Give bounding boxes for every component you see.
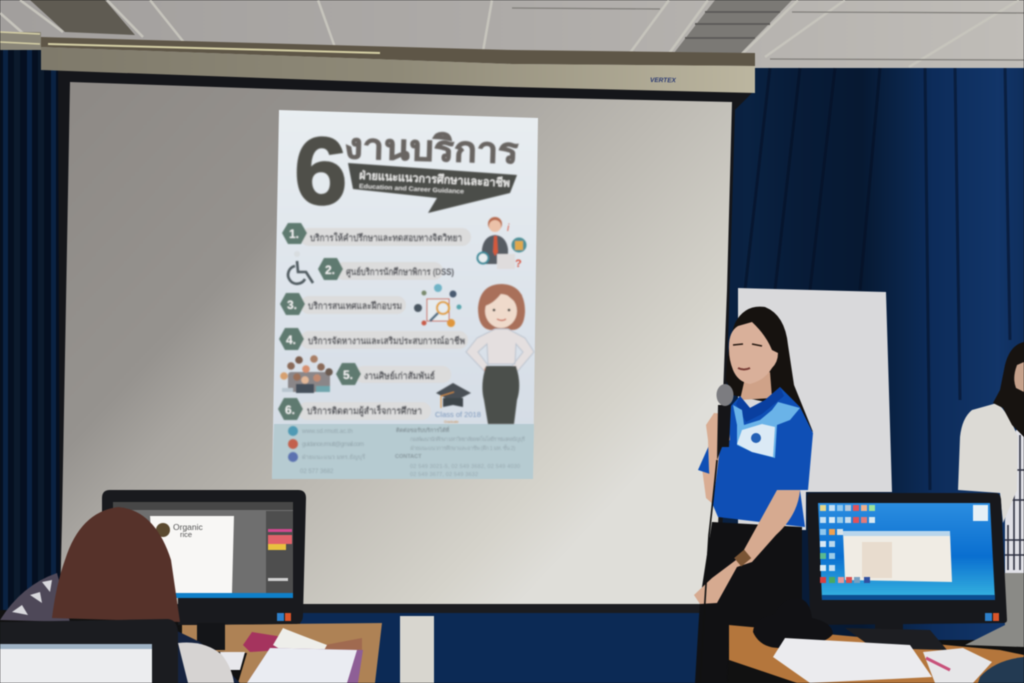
subtitle banner: Education and Career Guidance	[359, 183, 465, 196]
service 2 with wheelchair icon: ศูนย์บริการนักศึกษาพิการ (DSS)	[346, 266, 454, 279]
footer contact info: 02 549 3021-5, 02 549 3682, 02 549 4030	[410, 464, 520, 470]
service 6	[278, 398, 431, 420]
taskbar	[822, 595, 995, 600]
curtain: left	[0, 50, 72, 610]
artboard with logo text: Organic	[173, 522, 204, 532]
desktop wallpaper	[818, 503, 995, 600]
pillar under screen	[400, 616, 434, 683]
blouse	[1005, 430, 1024, 575]
service 3: 3.	[287, 298, 297, 312]
footer contact info: www.sd.rmutt.ac.th	[301, 429, 353, 435]
presenter	[694, 307, 813, 683]
poster background	[272, 110, 538, 479]
woman at far right	[958, 342, 1024, 575]
subtitle banner: ฝ่ายแนะแนวการศึกษาและอาชีพ	[359, 169, 510, 190]
curtain: right	[700, 68, 1024, 640]
icon: graduation cap: Graduate	[444, 420, 459, 424]
icon: information search	[414, 284, 462, 327]
shirt logo patch	[733, 402, 800, 458]
screen frame shadow	[58, 68, 755, 610]
items on left desk	[220, 628, 362, 670]
mic cable	[700, 460, 717, 683]
subtitle banner	[348, 163, 517, 213]
whiteboard	[738, 288, 892, 530]
big number 6: 6	[294, 118, 347, 225]
service 5 with alumni group icon: 5.	[343, 368, 353, 382]
open window	[843, 532, 952, 582]
left monitor	[102, 490, 306, 650]
footer contact info: CONTACT	[395, 454, 422, 460]
wristband	[734, 550, 751, 566]
artboard with logo text	[150, 516, 234, 593]
service 4: บริการจัดหางานและเสริมประสบการณ์อาชีพ	[308, 335, 465, 347]
tool panels	[266, 511, 293, 593]
illustration: woman	[466, 284, 534, 424]
binder on desk	[247, 648, 363, 683]
footer contact info: guidance.rmutt@gmail.com	[302, 442, 364, 448]
seated attendee hair	[52, 507, 180, 622]
right monitor	[807, 493, 1007, 650]
icon: consultant: ?	[515, 258, 522, 270]
footer contact info	[288, 426, 525, 478]
service 3: บริการสนเทศและฝึกอบรม	[308, 300, 402, 312]
footer contact info: กองพัฒนานักศึกษา มหาวิทยาลัยเทคโนโลยีราชมงคลธัญบุรี	[410, 435, 525, 443]
service 2 with wheelchair icon	[288, 251, 454, 284]
microphone	[716, 384, 734, 460]
left desk	[182, 623, 382, 683]
seated attendee patterned shoulder	[0, 573, 70, 622]
headphones	[753, 598, 833, 648]
right vent	[674, 0, 792, 55]
gray bag behind monitor	[965, 573, 1024, 647]
service 5 with alumni group icon	[280, 355, 451, 393]
face	[729, 322, 778, 384]
service 1: บริการให้คำปรึกษาและทดสอบทางจิตวิทยา	[310, 232, 462, 244]
editor interface	[113, 502, 293, 598]
sticker badges	[985, 613, 992, 621]
desktop icons	[820, 505, 988, 583]
skirt	[695, 522, 802, 683]
service 3	[280, 293, 406, 315]
foreground laptop	[0, 619, 178, 683]
service 6: บริการติดตามผู้สำเร็จการศึกษา	[307, 404, 422, 418]
lowered forearm and hand	[694, 490, 800, 604]
footer contact info: 02 577 3682	[300, 469, 334, 475]
sticker badges	[277, 613, 284, 621]
neck	[740, 372, 772, 400]
service 2 with wheelchair icon: 2.	[325, 263, 335, 277]
icon: graduation cap	[435, 383, 481, 424]
footer contact info: ฝ่ายแนะแนวการศึกษาและอาชีพ (ตึก 1 มท. ชั้น 2)	[410, 444, 515, 452]
service 4	[279, 328, 468, 350]
face	[1014, 362, 1024, 392]
footer contact info: ติดต่อขอรับบริการได้ที่	[396, 426, 450, 434]
cardigan	[958, 403, 1018, 523]
seated attendee navy top and white shoulder	[175, 630, 240, 683]
upper arm	[702, 468, 716, 505]
service 1: 1.	[289, 227, 299, 241]
ceiling	[0, 0, 1024, 72]
hair	[726, 307, 813, 432]
service 4: 4.	[286, 333, 296, 347]
papers on desk	[773, 638, 1024, 683]
icon: graduation cap: Class of 2018	[435, 410, 481, 419]
icon: consultant: i	[507, 223, 510, 234]
slide poster	[272, 110, 538, 479]
polo shirt	[698, 387, 813, 527]
service 1	[282, 223, 471, 246]
footer contact info: 02 549 3677, 02 549 3632	[410, 472, 478, 478]
footer band	[272, 424, 534, 479]
curtain: lower under screen	[300, 612, 720, 683]
artboard with logo text: rice	[180, 530, 192, 539]
left vent	[30, 0, 135, 35]
heading: งานบริการ	[344, 127, 519, 171]
taskbar	[170, 593, 293, 598]
projector housing bar	[41, 37, 755, 93]
icon: consultant	[476, 217, 526, 270]
footer contact info: ฝ่ายแนะแนว มทร.ธัญบุรี	[302, 453, 366, 461]
right desk	[729, 625, 1024, 683]
brand label: VERTEX	[650, 77, 677, 84]
service 6: 6.	[285, 403, 295, 417]
projection screen	[60, 82, 732, 613]
hair	[993, 342, 1024, 437]
service 5 with alumni group icon: งานศิษย์เก่าสัมพันธ์	[364, 370, 435, 382]
raised forearm and hand	[706, 413, 730, 505]
